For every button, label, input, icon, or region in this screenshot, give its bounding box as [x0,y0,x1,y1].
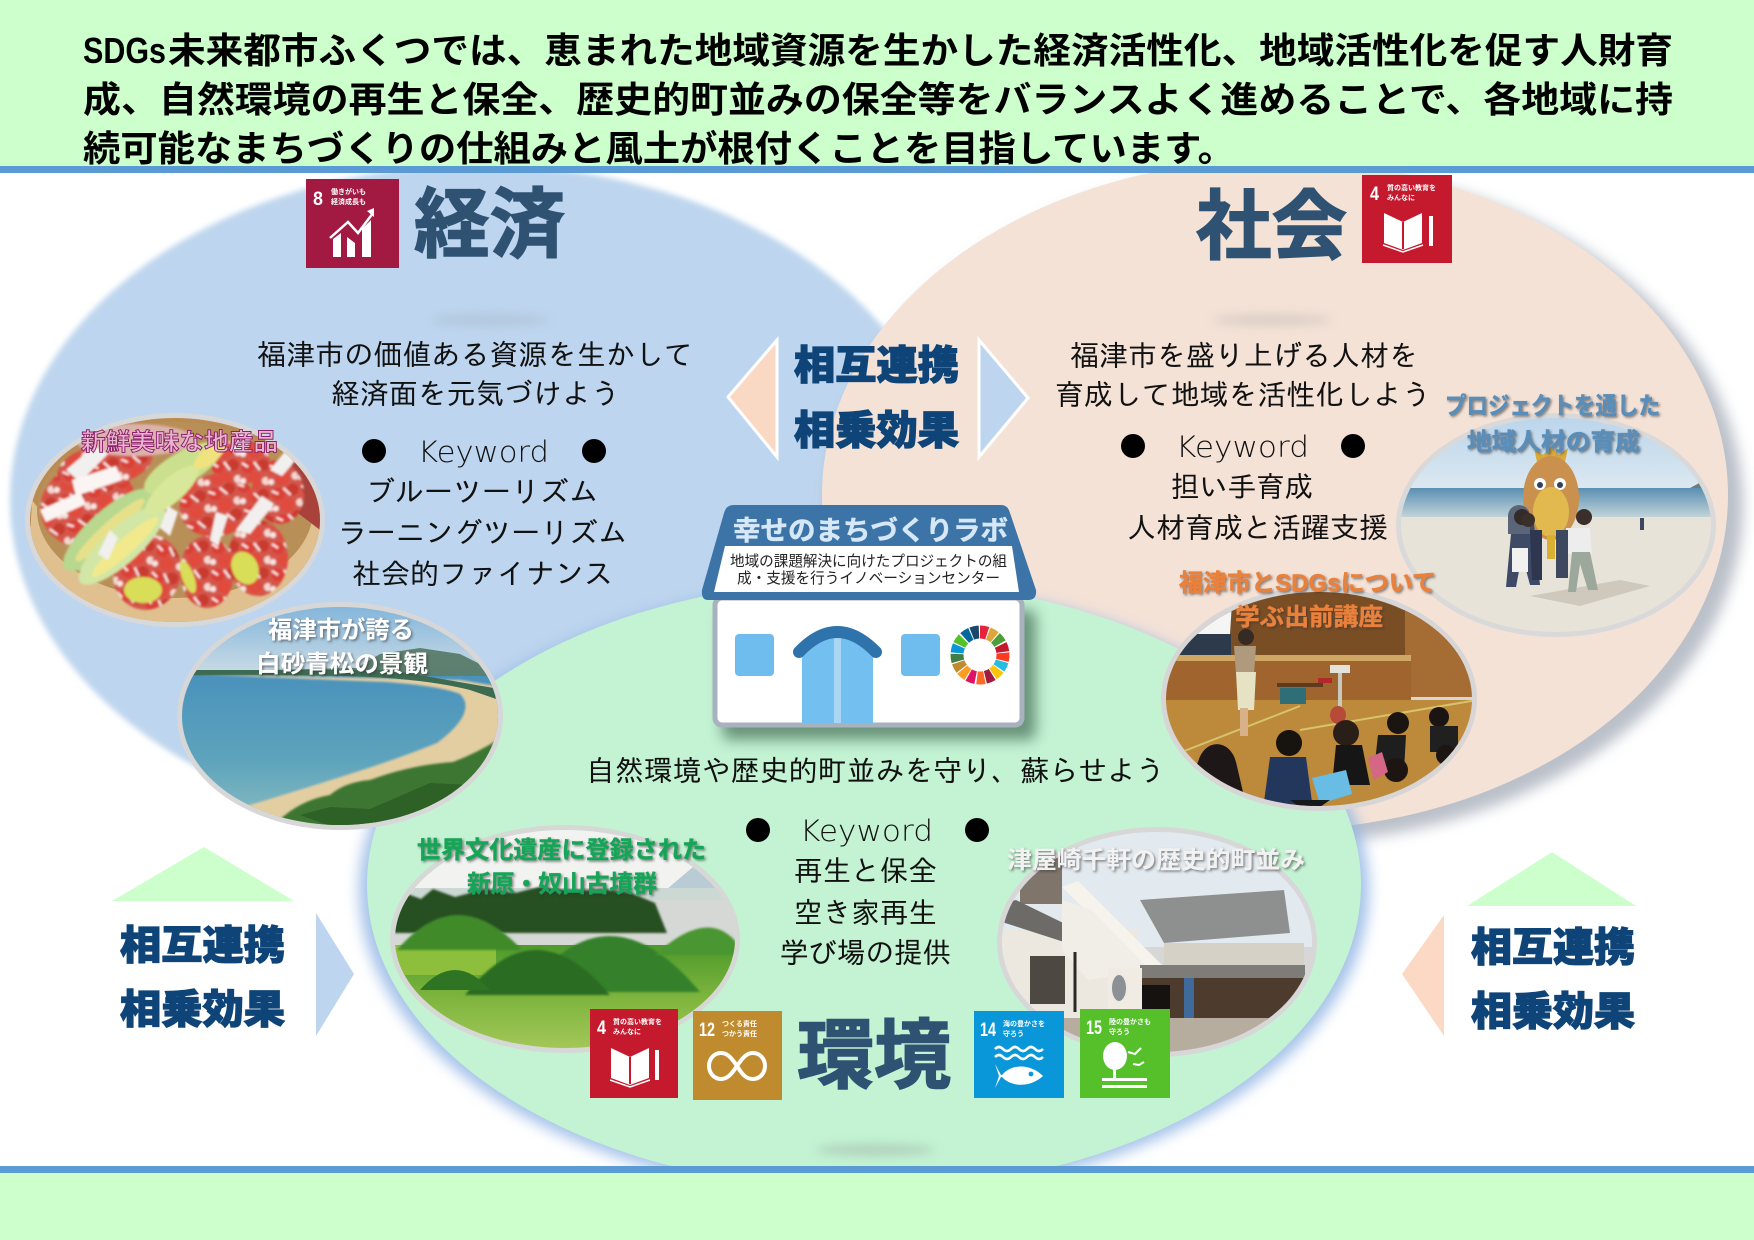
arrow: left side right [316,913,354,1036]
heading: society: 社会 [1196,185,1347,270]
label: center synergy: 相乗効果 [794,409,959,453]
icon: SDG 12: つかう責任 [722,1029,757,1038]
keyword row: economy: Keyword [418,435,549,469]
bag tops [66,424,296,560]
panel: society ellipse [822,160,1743,843]
photo: historic townscape [996,827,1318,1063]
label: right synergy: 相乗効果 [1471,990,1635,1034]
icon: SDG 14: 海の豊かさを [1003,1019,1045,1028]
mascot [1523,446,1579,559]
header text: 未来都市ふくつでは、恵まれた地域資源を生かした経済活性化、地域活性化を促す人財育 [168,30,1673,71]
label: beach [256,616,428,678]
icon: SDG 8: 経済成長も [331,197,366,206]
text block: environment: 学び場の提供 [780,938,951,970]
footer band [0,1166,1754,1240]
label: mascot photo: プロジェクトを通した [1445,393,1660,420]
seated students [1197,707,1458,806]
icon: SDG 14 [974,1011,1064,1098]
keyword row: environment [746,814,989,848]
icon: SDG 12: つくる責任 [722,1019,757,1028]
icon: SDG 4 environment: みんなに [613,1027,641,1036]
house title: 幸せのまちづくりラボ [733,516,1008,546]
arrow: center left [728,340,777,457]
label: mascot photo [1445,393,1660,456]
label: school lecture: 福津市とSDGsについて [1179,570,1436,597]
lecturer [1234,629,1256,736]
icon: SDG wheel [948,623,1012,687]
icon: SDG 15: 陸の豊かさも [1109,1017,1151,1026]
label: local produce: 新鮮美味な地産品 [81,429,278,456]
icon: SDG 4 society [1362,175,1452,263]
icon: SDG 15 [1080,1009,1170,1098]
photo: white sand beach [177,602,520,840]
header band [0,0,1754,173]
panel: environment ellipse [359,580,1369,1196]
label: school lecture: 学ぶ出前講座 [1235,604,1383,631]
text block: society: 人材育成と活躍支援 [1127,513,1388,545]
roof sign [714,546,1019,592]
house: innovation center [702,505,1036,740]
label: left synergy: 相乗効果 [120,988,285,1032]
keyword row: economy [362,435,606,469]
label: left synergy [120,924,285,1032]
group of people [1506,505,1644,592]
icon: SDG 4 society: 4 [1370,184,1379,205]
label: townscape: 津屋崎千軒の歴史的町並み [1007,847,1305,874]
text block: economy: 社会的ファイナンス [352,559,613,591]
photo: mascot on beach [1396,393,1716,637]
text block: economy: 福津市の価値ある資源を生かして [257,340,693,372]
text block: economy: ブルーツーリズム [366,477,598,509]
arrow: right side left [1402,915,1444,1036]
icon: SDG 14: 14 [980,1020,996,1041]
header text: SDGs [83,30,166,71]
text block: economy: 経済面を元気づけよう [331,379,620,411]
header text [83,30,1673,169]
text block: society: 福津市を盛り上げる人材を [1070,341,1418,373]
heading: environment: 環境 [797,1014,951,1099]
smudge: society shadow [1212,314,1332,326]
label: right synergy [1471,926,1635,1034]
roof [702,505,1036,600]
icon: SDG 15: 15 [1086,1018,1102,1039]
label: center synergy: 相互連携 [794,344,959,388]
keyword row: society: Keyword [1176,430,1309,464]
heading: economy: 経済 [414,183,565,268]
house subtitle: 地域の課題解決に向けたプロジェクトの組 [730,553,1007,570]
header text: 続可能なまちづくりの仕組みと風土が根付くことを目指しています。 [83,128,1235,169]
smudge: environment shadow [815,1144,935,1156]
photo: local produce [25,413,325,640]
photo: burial mounds [390,825,745,1055]
icon: SDG 8: 8 [313,189,323,210]
label: beach: 福津市が誇る [268,616,414,644]
header text: 成、自然環境の再生と保全、歴史的町並みの保全等をバランスよく進めることで、各地域に持 [83,79,1673,120]
smudge: economy shadow [430,314,550,326]
label: left synergy: 相互連携 [120,924,285,968]
arrow: center right [979,340,1028,457]
stickers [124,577,162,603]
window left [735,634,774,676]
text block: society: 育成して地域を活性化しよう [1055,380,1431,412]
tomato bags [40,474,134,546]
house subtitle: 成・支援を行うイノベーションセンター [737,570,1000,587]
window right [901,634,940,676]
text block: environment [586,756,1165,970]
label: burial mounds: 新原・奴山古墳群 [467,871,657,898]
label: center synergy [794,344,959,453]
arrow: right up [1467,852,1636,906]
icon: SDG 8 [306,179,399,268]
icon: SDG 14: 守ろう [1003,1029,1024,1038]
arrow: left up [112,847,294,901]
desk and projector [1277,665,1350,724]
icon: SDG 4 environment [590,1009,678,1098]
text block: economy: ラーニングツーリズム [338,518,627,550]
keyword row: environment: Keyword [800,814,933,848]
house subtitle [730,553,1007,587]
label: burial mounds: 世界文化遺産に登録された [417,837,706,864]
icon: SDG 15: 守ろう [1109,1027,1130,1036]
label: mascot photo: 地域人材の育成 [1467,429,1640,456]
text block: environment: 再生と保全 [794,856,937,888]
door [799,632,876,723]
text block: economy [257,340,693,591]
label: beach: 白砂青松の景観 [256,651,428,678]
text block: environment: 自然環境や歴史的町並みを守り、蘇らせよう [586,756,1165,788]
photo: school lecture [1161,570,1480,822]
text block: society [1055,341,1431,545]
icon: SDG 4 environment: 4 [597,1018,606,1039]
label: school lecture [1179,570,1436,631]
panel: economy ellipse [10,165,950,835]
icon: SDG 4 society: みんなに [1387,193,1415,202]
icon: SDG 12 [693,1011,782,1100]
icon: SDG 4 environment: 質の高い教育を [613,1017,662,1026]
label: burial mounds [417,837,706,898]
label: right synergy: 相互連携 [1471,926,1635,970]
icon: SDG 12: 12 [699,1020,715,1041]
text block: environment: 空き家再生 [794,898,937,930]
icon: SDG 8: 働きがいも [331,187,366,196]
corn [62,488,153,572]
icon: SDG 4 society: 質の高い教育を [1387,183,1436,192]
keyword row: society [1121,430,1365,464]
text block: society: 担い手育成 [1171,472,1313,504]
